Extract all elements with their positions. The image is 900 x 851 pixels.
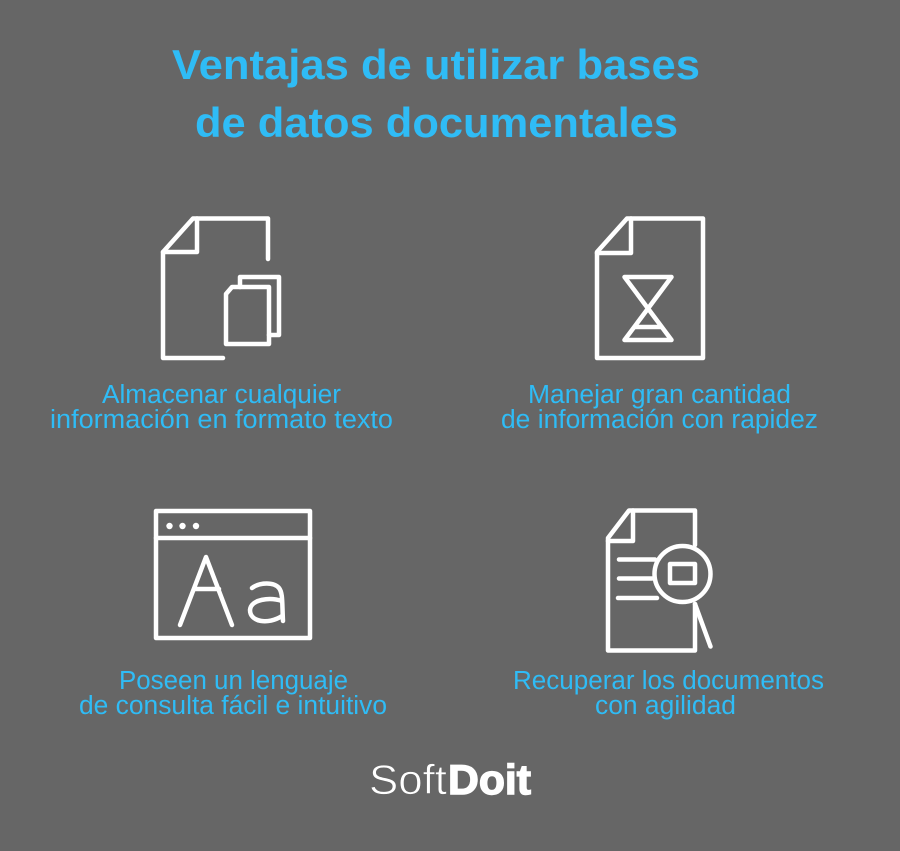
text: poseen: de consulta fácil e intuitivo — [79, 692, 387, 720]
text: poseen — [79, 667, 387, 720]
logo: SoftDoit — [369, 756, 531, 803]
text: recuperar — [513, 667, 824, 720]
logo: SoftDoit: Doit — [448, 756, 531, 803]
text: poseen: Poseen un lenguaje — [119, 667, 348, 695]
icon: browser window with Aa — [156, 511, 310, 638]
title — [172, 41, 700, 146]
text: almacenar — [50, 381, 393, 434]
text: almacenar: Almacenar cualquier — [102, 381, 342, 409]
title: Ventajas de utilizar bases — [172, 41, 700, 88]
text: recuperar: con agilidad — [595, 692, 736, 720]
text: manejar: Manejar gran cantidad — [528, 381, 791, 409]
logo: SoftDoit: Soft — [369, 756, 447, 803]
text: manejar: de información con rapidez — [501, 406, 818, 434]
icon: document with hourglass — [597, 218, 703, 358]
text: manejar — [501, 381, 818, 434]
icon: document with copies — [163, 218, 279, 358]
text: recuperar: Recuperar los documentos — [513, 667, 824, 695]
text: almacenar: información en formato texto — [50, 406, 393, 434]
icon: document with magnifier — [608, 510, 710, 650]
title: de datos documentales — [195, 99, 678, 146]
